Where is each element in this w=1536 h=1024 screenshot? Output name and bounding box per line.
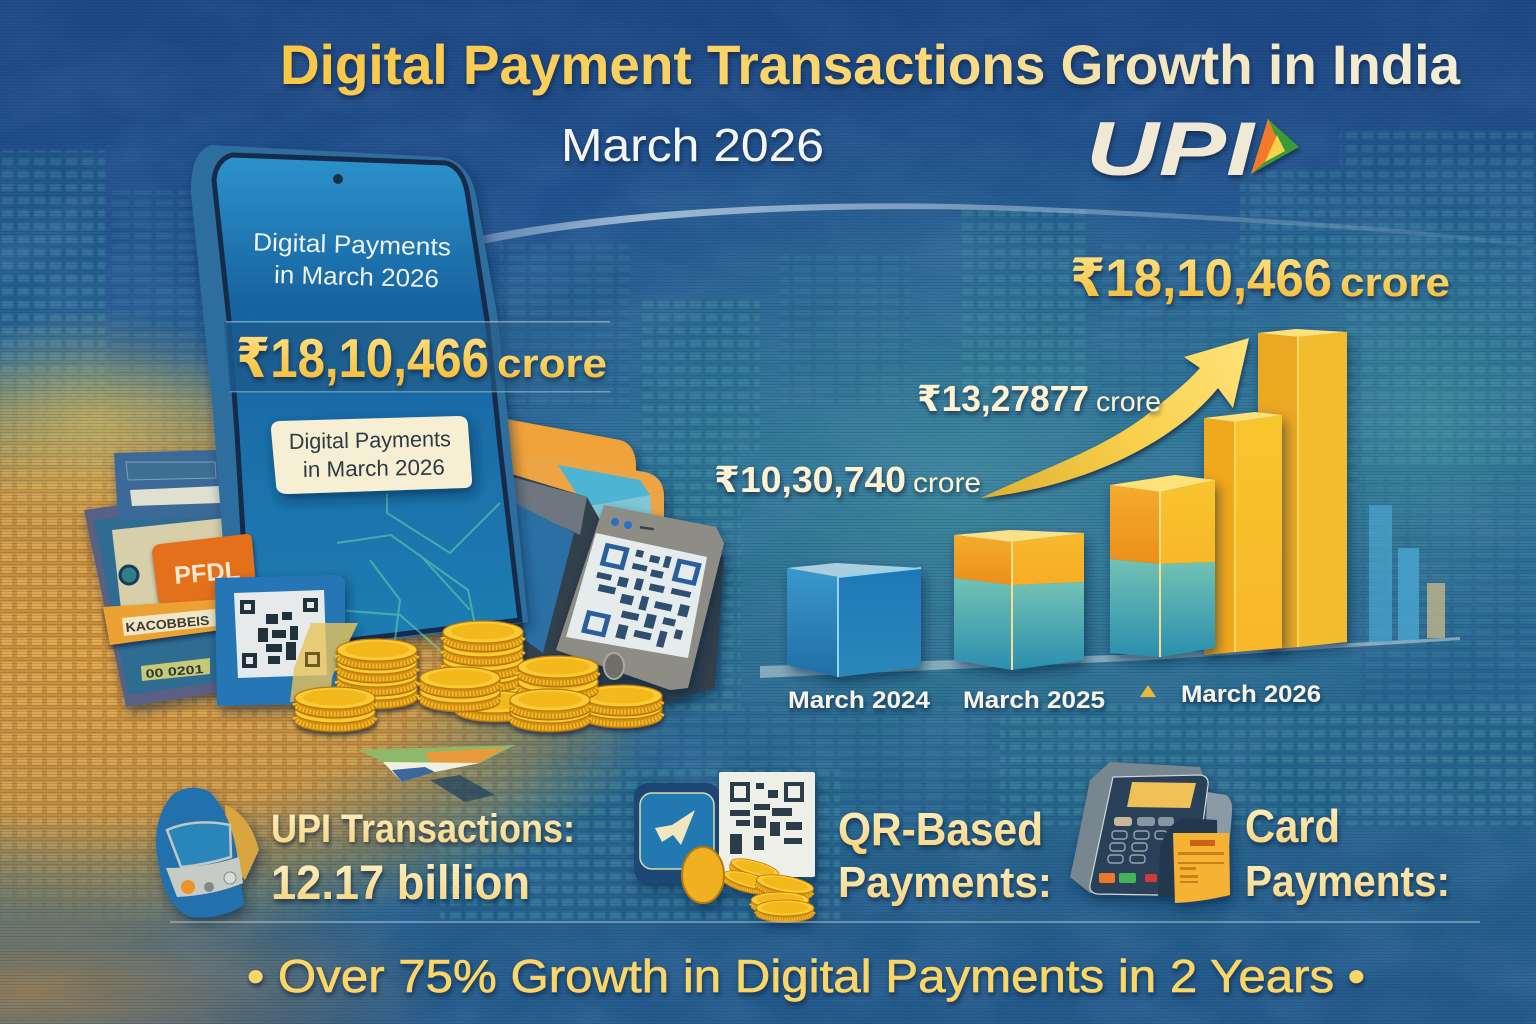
icon: POS terminal and orange card: [1070, 762, 1232, 903]
label: March 2025 value: crore: [1096, 386, 1161, 417]
bar: tallest gold: [1258, 329, 1347, 650]
stat: QR-based payments: [634, 772, 1052, 922]
screen card: Digital Payments in March 2026: in March 2026: [303, 455, 445, 482]
panel: left wallet back: [84, 450, 232, 707]
footer: growth callout: • Over 75% Growth in Digital Payments in 2 Years •: [247, 950, 1365, 1002]
panel: blue QR card: [215, 575, 358, 706]
left wallet cards in front of phone: [103, 534, 257, 681]
axis labels: March 2025: [963, 687, 1105, 714]
orange label strip: [103, 597, 257, 645]
text: [271, 807, 575, 910]
bar chart: growth: [714, 249, 1460, 714]
stat: card payments: [1070, 762, 1450, 906]
bar: March 2025: [954, 530, 1084, 670]
icon: blue UPI device: [156, 788, 259, 918]
panel: right folders and wallet: [501, 418, 724, 702]
headline amount banner: ₹18,10,466: [236, 327, 489, 389]
text: Card: [1245, 800, 1340, 852]
label: March 2024 value: crore: [913, 467, 981, 498]
bar: March 2026 stacked: [1110, 475, 1215, 657]
axis labels: [788, 681, 1321, 714]
headline amount banner: [224, 321, 610, 392]
orange label strip: KACOBBEIS: [125, 613, 210, 635]
text: 12.17 billion: [271, 857, 530, 910]
screen heading: Digital Payments: [253, 228, 451, 262]
screen heading: in March 2026: [274, 261, 439, 293]
UPI logo: [1086, 107, 1299, 192]
divider: [170, 921, 1480, 923]
green label: [141, 658, 210, 681]
bar: March 2024: [787, 563, 921, 677]
text: UPI Transactions:: [271, 807, 575, 851]
axis labels: March 2024: [788, 687, 931, 714]
screen card: Digital Payments in March 2026: [271, 416, 472, 494]
phone: [191, 145, 528, 660]
subtitle: March 2026: March 2026: [561, 119, 824, 171]
title: Digital Payment Transactions Growth in India: [280, 33, 1461, 96]
bar: tall gold: [1204, 412, 1282, 655]
label: March 2024 value: ₹10,30,740: [714, 459, 906, 500]
icon: blue app tile with QR and coins: [634, 772, 815, 922]
gold coin stacks: [295, 621, 662, 732]
axis labels: March 2026: [1181, 681, 1321, 708]
circuit pattern on screen: [337, 493, 500, 650]
label: March 2025 value: ₹13,27877: [917, 378, 1089, 419]
text: [838, 803, 1052, 907]
icon: badge on card: [120, 566, 138, 584]
icon: tricolour arrow mark: [1251, 119, 1299, 174]
small tricolour flyer: [358, 745, 515, 802]
illustration: wallets and folders behind the phone: [84, 418, 724, 707]
decorative arc: [480, 203, 1536, 249]
QR code: [566, 533, 707, 658]
axis baseline: [760, 637, 1460, 678]
translucent gold note: [290, 623, 358, 702]
UPI logo: UPI: [1086, 107, 1256, 192]
text: Payments:: [1245, 857, 1450, 906]
button: [604, 653, 624, 679]
stat: UPI transactions: [156, 788, 575, 918]
green label: 00 0201: [145, 662, 204, 681]
headline amount banner: crore: [497, 342, 607, 386]
screen card: Digital Payments in March 2026: Digital Payments: [289, 426, 451, 454]
label: March 2026 value: ₹18,10,466: [1070, 249, 1332, 308]
label: March 2024 value: [714, 459, 981, 500]
phone screen: [214, 155, 520, 652]
growth arrow: [981, 338, 1249, 498]
screen camera: [333, 174, 343, 184]
phone body: [191, 145, 528, 660]
label: March 2026 value: crore: [1340, 261, 1450, 305]
small triangle marker: [1140, 685, 1156, 697]
background small bars: [1369, 505, 1445, 642]
orange PFDL card: [152, 534, 257, 606]
text: QR-Based: [838, 803, 1043, 855]
text: Payments:: [838, 858, 1052, 907]
orange PFDL card: PFDL: [173, 556, 241, 590]
text: [1245, 800, 1450, 906]
panel: right QR device: [556, 505, 724, 690]
screen heading: [253, 228, 451, 293]
